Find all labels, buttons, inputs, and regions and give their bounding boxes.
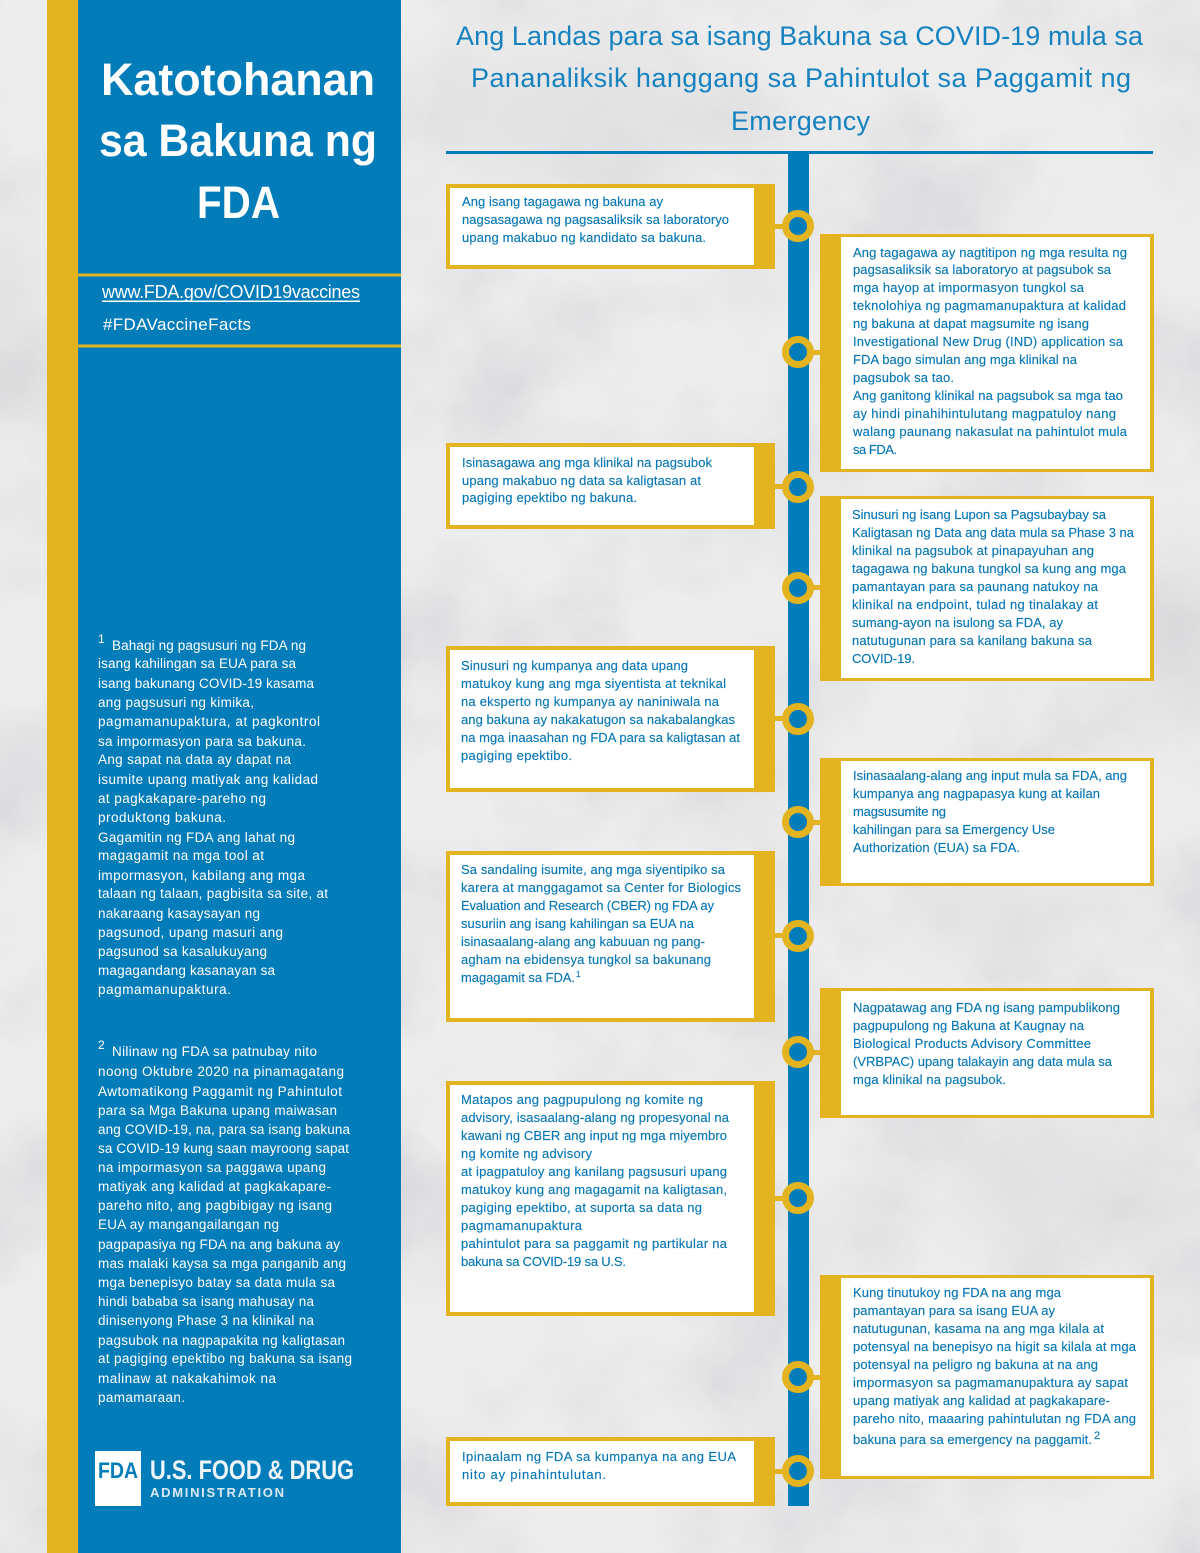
node 8 [786, 1040, 821, 1064]
step 9 [446, 1081, 775, 1316]
footnote 2: mas malaki kaysa sa mga panganib ang [98, 1256, 346, 1271]
step 9: pagmamanupaktura [461, 1218, 583, 1233]
step 2: Investigational New Drug (IND) application sa [853, 334, 1124, 349]
timeline nodes [775, 214, 821, 1484]
step 7: karera at manggagamot sa Center for Biologics [461, 880, 742, 895]
step 3 [446, 443, 775, 529]
footnote 2: ang COVID-19, na, para sa isang bakuna [98, 1122, 350, 1137]
step 4: klinikal na endpoint, tulad ng tinalakay at [852, 597, 1098, 612]
heading: Pananaliksik hanggang sa Pahintulot sa Paggamit ng [471, 63, 1131, 93]
footnote 1: isang kahilingan sa EUA para sa [98, 656, 296, 671]
step 4: tagagawa ng bakuna tungkol sa kung ang mga [852, 561, 1127, 576]
step 4: sumang-ayon na isulong sa FDA, ay [852, 615, 1064, 630]
panel: left sidebar [47, 0, 401, 1553]
step 10: bakuna para sa emergency na paggamit. [853, 1432, 1092, 1447]
step 2: walang paunang nakasulat na pahintulot mula [852, 424, 1128, 439]
step 3: upang makabuo ng data sa kaligtasan at [462, 473, 701, 488]
FDA logo: U.S. FOOD & DRUG [150, 1455, 354, 1485]
footnote 2: Awtomatikong Paggamit ng Pahintulot [98, 1084, 342, 1099]
heading: Ang Landas para sa isang Bakuna sa COVID-19 mula sa [456, 21, 1144, 51]
step 5: na eksperto ng kumpanya ay naniniwala na [461, 694, 720, 709]
footnote 1: pagsunod, upang masuri ang [98, 925, 283, 940]
step 10: pareho nito, maaaring pahintulutan ng FDA ang [853, 1411, 1136, 1426]
footnote 2: pagsubok na nagpapakita ng kaligtasan [98, 1333, 345, 1348]
footnote 1: pagmamanupaktura, at pagkontrol [98, 714, 320, 729]
step 9: pahintulot para sa paggamit ng partikular na [461, 1236, 728, 1251]
footnote 1: 1 [98, 632, 105, 646]
timeline spine [788, 153, 809, 1506]
node 4 [786, 576, 821, 600]
step 4: COVID-19. [852, 651, 915, 666]
step 6: kumpanya ang nagpapasya kung at kailan [853, 786, 1100, 801]
step 1 [446, 184, 775, 269]
step 10: Kung tinutukoy ng FDA na ang mga [853, 1285, 1062, 1300]
step 5: na mga inaasahan ng FDA para sa kaligtasan at [461, 730, 740, 745]
step 4: natutugunan para sa kanilang bakuna sa [852, 633, 1093, 648]
step 4 [820, 496, 1154, 681]
node 10 [786, 1364, 821, 1390]
footnote 2: na impormasyon sa paggawa upang [98, 1160, 326, 1175]
footnote 1: at pagkakapare-pareho ng [98, 791, 266, 806]
footnote 2: mga benepisyo batay sa data mula sa [98, 1275, 335, 1290]
node 5 [775, 706, 810, 732]
step 11 [446, 1437, 775, 1506]
step 10 [820, 1275, 1154, 1479]
sidebar title: sa Bakuna ng [99, 115, 377, 166]
footnote 1: pagmamanupaktura. [98, 982, 231, 997]
footnote 1: Gagamitin ng FDA ang lahat ng [98, 830, 295, 845]
step 5: Sinusuri ng kumpanya ang data upang [461, 658, 688, 673]
footnote 2: hindi bababa sa isang mahusay na [98, 1294, 314, 1309]
step 7: agham na ebidensya tungkol sa bakunang [461, 952, 711, 967]
footnote 2 [98, 1038, 352, 1405]
step 10: upang matiyak ang kalidad at pagkakapare- [853, 1393, 1110, 1408]
website link and hashtag: www.FDA.gov/COVID19vaccines [101, 282, 360, 302]
blue sidebar background [78, 0, 401, 1553]
step 2: teknolohiya ng pagmamanupaktura at kalidad [853, 298, 1126, 313]
step 11: Ipinaalam ng FDA sa kumpanya na ang EUA [462, 1449, 736, 1464]
step 10: potensyal na benepisyo na higit sa kilala at mga [853, 1339, 1137, 1354]
step 5: matukoy kung ang mga siyentista at teknikal [461, 676, 726, 691]
step 7: isinasaalang-alang ang kabuuan ng pang- [461, 934, 705, 949]
step 4: Sinusuri ng isang Lupon sa Pagsubaybay sa [852, 507, 1107, 522]
step 6: Isinasaalang-alang ang input mula sa FDA, ang [853, 768, 1127, 783]
node 9 [775, 1186, 810, 1210]
step 8 [820, 988, 1154, 1118]
footnote 1: magagandang kasanayan sa [98, 963, 275, 978]
step 2: pagsasaliksik sa laboratoryo at pagsubok sa [853, 262, 1112, 277]
footnote 1: talaan ng talaan, pagbisita sa site, at [98, 886, 328, 901]
step 1: upang makabuo ng kandidato sa bakuna. [462, 230, 706, 245]
footnote 2: pareho nito, ang pagbibigay ng isang [98, 1198, 332, 1213]
footnote 2: para sa Mga Bakuna upang maiwasan [98, 1103, 337, 1118]
step 10: pamantayan para sa isang EUA ay [853, 1303, 1056, 1318]
footnote 2: Nilinaw ng FDA sa patnubay nito [112, 1044, 317, 1059]
step 11: nito ay pinahintulutan. [462, 1467, 606, 1482]
step 2: pagsubok sa tao. [853, 370, 954, 385]
step 6: magsusumite ng [853, 804, 946, 819]
step 8: (VRBPAC) upang talakayin ang data mula sa [853, 1054, 1113, 1069]
step 10: potensyal na peligro ng bakuna at na ang [853, 1357, 1098, 1372]
footnote 1: isang bakunang COVID-19 kasama [98, 676, 314, 691]
footnote 1: impormasyon, kabilang ang mga [98, 868, 305, 883]
footnote 1: nakaraang kasaysayan ng [98, 906, 260, 921]
step 7: Sa sandaling isumite, ang mga siyentipiko sa [461, 862, 726, 877]
footnote 1: Bahagi ng pagsusuri ng FDA ng [112, 638, 306, 653]
footnote 2: sa COVID-19 kung saan mayroong sapat [98, 1141, 349, 1156]
footnote 1: produktong bakuna. [98, 810, 226, 825]
step 2: Ang ganitong klinikal na pagsubok sa mga tao [853, 388, 1123, 403]
step 2: mga hayop at impormasyon tungkol sa [853, 280, 1085, 295]
footnote 1: magagamit na mga tool at [98, 848, 264, 863]
footnote 2: at pagiging epektibo ng bakuna sa isang [98, 1351, 352, 1366]
sidebar title [99, 54, 377, 228]
step 10: 2 [1094, 1430, 1100, 1442]
step 7: susuriin ang isang kahilingan sa EUA na [461, 916, 695, 931]
step 9: bakuna sa COVID-19 sa U.S. [461, 1254, 626, 1269]
heading: Emergency [731, 106, 870, 136]
node 1 [775, 214, 810, 238]
footnote 2: pamamaraan. [98, 1390, 185, 1405]
footnote 1: sa impormasyon para sa bakuna. [98, 734, 306, 749]
step 4: klinikal na pagsubok at pinapayuhan ang [852, 543, 1094, 558]
gold sidebar stripe [47, 0, 78, 1553]
step 5 [446, 646, 775, 792]
step 1: nagsasagawa ng pagsasaliksik sa laboratoryo [462, 212, 729, 227]
step 9: Matapos ang pagpupulong ng komite ng [461, 1092, 703, 1107]
step 4: Kaligtasan ng Data ang data mula sa Phase 3 na [852, 525, 1135, 540]
step 9: pagiging epektibo, at suporta sa data ng [461, 1200, 702, 1215]
step 1: Ang isang tagagawa ng bakuna ay [462, 194, 664, 209]
footnote 1: pagsunod sa kasalukuyang [98, 944, 267, 959]
website link and hashtag: #FDAVaccineFacts [103, 315, 251, 334]
step 2: sa FDA. [853, 442, 897, 457]
node 2 [786, 340, 821, 364]
step 10: impormasyon sa pagmamanupaktura ay sapat [853, 1375, 1128, 1390]
footnote 1: isumite upang matiyak ang kalidad [98, 772, 318, 787]
node 7 [775, 924, 810, 948]
FDA logo [95, 1451, 354, 1506]
footnote 2: dinisenyong Phase 3 na klinikal na [98, 1313, 314, 1328]
footnote 2: pagpapasiya ng FDA na ang bakuna ay [98, 1237, 340, 1252]
sidebar title: Katotohanan [101, 54, 375, 105]
step 7 [446, 851, 775, 1022]
step 2 [820, 234, 1154, 472]
step 4: pamantayan para sa paunang natukoy na [852, 579, 1099, 594]
step 2: ng bakuna at dapat magsumite ng isang [853, 316, 1089, 331]
heading [456, 21, 1144, 136]
step 8: Nagpatawag ang FDA ng isang pampublikong [853, 1000, 1120, 1015]
step 3: pagiging epektibo ng bakuna. [462, 490, 637, 505]
footnote 2: EUA ay mangangailangan ng [98, 1217, 279, 1232]
step 6 [820, 758, 1154, 886]
step 9: ng komite ng advisory [461, 1146, 592, 1161]
node 11 [775, 1458, 810, 1484]
step 9: advisory, isasaalang-alang ng propesyonal na [461, 1110, 730, 1125]
step 6: kahilingan para sa Emergency Use [853, 822, 1055, 837]
footnote 1: ang pagsusuri ng kimika, [98, 695, 254, 710]
website link and hashtag [101, 282, 360, 334]
step 8: pagpupulong ng Bakuna at Kaugnay na [853, 1018, 1085, 1033]
step 8: Biological Products Advisory Committee [853, 1036, 1091, 1051]
step 6: Authorization (EUA) sa FDA. [853, 840, 1020, 855]
step 9: at ipagpatuloy ang kanilang pagsusuri upang [461, 1164, 727, 1179]
footnote 2: noong Oktubre 2020 na pinamagatang [98, 1064, 344, 1079]
node 3 [775, 474, 810, 500]
step 2: Ang tagagawa ay nagtitipon ng mga resulta ng [853, 245, 1127, 260]
step 2: ay hindi pinahihintulutang magpatuloy nang [853, 406, 1116, 421]
step 10: natutugunan, kasama na ang mga kilala at [853, 1321, 1104, 1336]
step 7: Evaluation and Research (CBER) ng FDA ay [461, 898, 714, 913]
step 5: ang bakuna ay nakakatugon sa nakabalangkas [461, 712, 736, 727]
FDA logo: ADMINISTRATION [150, 1485, 284, 1500]
step 8: mga klinikal na pagsubok. [853, 1072, 1006, 1087]
step 7: 1 [576, 970, 581, 979]
footnote 2: matiyak ang kalidad at pagkakapare- [98, 1179, 331, 1194]
step 9: kawani ng CBER ang input ng mga miyembro [461, 1128, 727, 1143]
FDA logo: FDA [98, 1458, 138, 1483]
step 5: pagiging epektibo. [461, 748, 572, 763]
footnote 2: 2 [98, 1038, 105, 1052]
footnote 1: Ang sapat na data ay dapat na [98, 752, 291, 767]
step 3: Isinasagawa ang mga klinikal na pagsubok [462, 455, 712, 470]
step 7: magagamit sa FDA. [461, 970, 575, 985]
node 6 [786, 810, 821, 834]
sidebar title: FDA [197, 177, 280, 228]
footnote 2: malinaw at nakakahimok na [98, 1371, 276, 1386]
step 9: matukoy kung ang magagamit na kaligtasan, [461, 1182, 727, 1197]
step 2: FDA bago simulan ang mga klinikal na [853, 352, 1078, 367]
footnote 1 [98, 632, 328, 997]
